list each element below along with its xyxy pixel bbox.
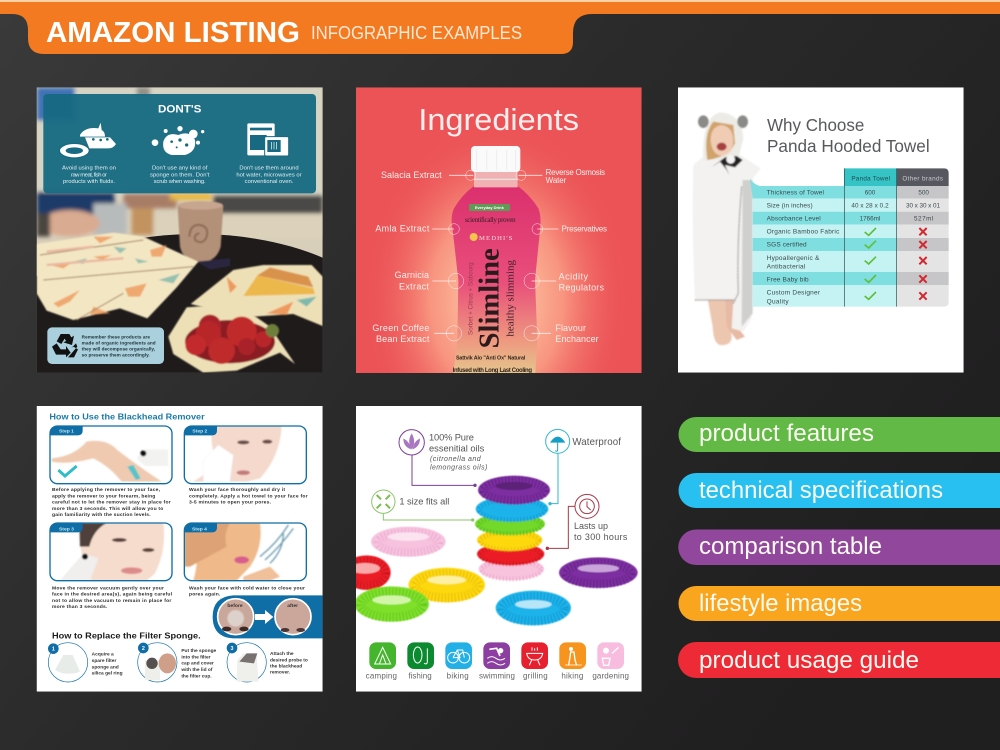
icon: swimming: swimming — [479, 672, 515, 681]
ingredient callouts: Regulators — [559, 282, 604, 292]
filter step 3 — [227, 643, 308, 682]
filter step 2: with the lid of — [180, 667, 213, 673]
bottle: Infused with Long Last Cooling — [453, 368, 532, 374]
callout: one size fits all — [372, 490, 474, 522]
panel: product features, mosquito bands — [343, 406, 642, 692]
filter step 2: into the filter — [181, 654, 211, 660]
comparison table: Other brands — [902, 175, 943, 182]
cup — [178, 201, 230, 269]
note text: Remember these products are — [82, 334, 150, 339]
step 1 text: apply the remover to your forearm, being — [52, 493, 155, 499]
step 1: Step 1 — [59, 429, 74, 435]
note text: so preserve them accordingly. — [82, 352, 150, 357]
panel: product usage guide — [37, 406, 323, 692]
panel: ingredients, product features — [356, 87, 642, 373]
note text: they will decompose organically, — [82, 346, 155, 351]
icon: hiking — [559, 642, 586, 681]
table — [36, 234, 323, 373]
row labels — [767, 189, 840, 306]
bottle — [452, 146, 541, 374]
pill: product features — [678, 417, 1000, 452]
photo background — [37, 87, 323, 238]
guide heading: How to Use the Blackhead Remover — [49, 411, 205, 421]
overlay captions: Don't use them around — [239, 165, 299, 171]
table heading: Why Choose — [767, 115, 864, 135]
filter step 1: sponge and — [92, 664, 119, 670]
stacked bands — [475, 476, 550, 580]
ingredient callouts: Acidity — [559, 271, 588, 281]
pill: product usage guide — [678, 642, 1000, 678]
icon: biking: biking — [447, 672, 469, 681]
step 1 — [50, 426, 172, 484]
comparison table — [750, 168, 949, 307]
row labels: Antibacterial — [767, 264, 805, 271]
activity icons — [366, 642, 629, 681]
step 2 text: Wash your face thoroughly and dry it — [189, 487, 285, 493]
filter step 2 — [138, 643, 217, 682]
overlay captions: scrub when washing. — [154, 179, 206, 185]
filter step 3: the blackhead — [270, 664, 302, 670]
filter step 2: 2 — [142, 646, 145, 652]
callout: essential oils: essenitial oils — [429, 444, 485, 454]
step 2 text — [189, 487, 308, 506]
step 2 — [184, 426, 306, 484]
overlay captions: sponge on them. Don't — [150, 172, 210, 178]
values: 30 x 30 x 01 — [906, 203, 940, 210]
filter step 1: spare filter — [92, 658, 116, 664]
filter step 3: 3 — [231, 646, 234, 652]
values: 527ml — [914, 216, 933, 223]
bottle: Everyday Drink — [475, 205, 505, 210]
before and after callout: after — [287, 603, 298, 609]
filter step 3: remover. — [270, 670, 291, 676]
overlay heading: DONT'S — [158, 103, 201, 115]
values: 1766ml — [860, 216, 880, 223]
ingredient callouts: Amla Extract — [375, 223, 430, 233]
step 3: Step 3 — [59, 526, 74, 532]
filter heading: How to Replace the Filter Sponge. — [52, 631, 201, 641]
icons: green checks — [865, 228, 876, 299]
icon: camping — [366, 642, 397, 681]
icon: grilling — [521, 642, 548, 681]
ingredient callouts: Reverse Osmosis — [546, 168, 605, 177]
ingredient callouts: Water — [546, 176, 567, 185]
callout: essential oils — [399, 430, 487, 487]
step 1 text: careful not to let the remover stay in place for — [52, 500, 171, 506]
ingredient callouts: Salacia Extract — [381, 170, 442, 180]
step 2: Step 2 — [192, 429, 208, 435]
step 3 text: Move the remover vacuum gently over your — [52, 585, 164, 591]
row labels: Hypoallergenic & — [767, 255, 820, 262]
overlay captions — [62, 165, 302, 185]
filter step 1: 1 — [52, 647, 55, 653]
filter step 2: Put the sponge — [181, 648, 217, 654]
legend pills — [678, 417, 1000, 678]
callout: lasts up to 300 hours: Lasts up — [574, 521, 608, 531]
icon: camping: camping — [366, 672, 397, 681]
comparison table: Panda Towel — [851, 175, 890, 182]
overlay captions: hot water, microwaves or — [236, 172, 302, 178]
step 3 text: face in the desired area(s), again being careful — [52, 592, 173, 598]
step 3 — [50, 523, 172, 581]
step 1 text: gain familiarity with the suction levels. — [52, 512, 151, 518]
filter step 3: desired probe to — [270, 657, 308, 663]
step 3 text: more than 3 seconds. — [52, 604, 108, 610]
subtitle: INFOGRAPHIC EXAMPLES — [311, 23, 522, 43]
dont's overlay — [43, 94, 316, 193]
overlay captions: raw meat, fish or — [71, 172, 107, 178]
icon: hiking: hiking — [561, 672, 583, 681]
ingredient callouts: Extract — [399, 281, 429, 291]
step 4 text: Wash your face with cold water to close your — [189, 585, 305, 591]
step 4 text: pores again. — [189, 592, 221, 598]
filter step 1: Acquire a — [92, 652, 114, 658]
table heading: Panda Hooded Towel — [767, 136, 930, 156]
filter step 3: Attach the — [270, 651, 294, 657]
row labels: SGS certified — [767, 242, 807, 249]
callout: lasts up to 300 hours: to 300 hours — [574, 532, 628, 542]
arrow — [255, 610, 273, 624]
pill: comparison table — [678, 530, 1000, 565]
title: AMAZON LISTING — [46, 17, 300, 49]
pill: product usage guide: product usage guide — [699, 647, 919, 674]
wrap and strawberries, bowl — [168, 303, 295, 373]
header banner — [0, 0, 1000, 54]
note text — [82, 334, 156, 357]
pill: lifestyle images: lifestyle images — [699, 590, 862, 617]
overlay captions: Don't use any kind of — [152, 165, 208, 171]
callout: waterproof: Waterproof — [572, 437, 621, 448]
icon: meat and chicken — [59, 123, 116, 158]
callout: essential oils: 100% Pure — [429, 433, 474, 443]
step 1 text: more than 3 seconds. This will allow you to — [52, 506, 163, 512]
row labels: Thickness of Towel — [767, 189, 824, 196]
callout connectors — [432, 170, 558, 341]
values: 40 x 28 x 0.2 — [851, 203, 889, 210]
values: 500 — [918, 189, 929, 196]
ingredient callouts: Green Coffee — [372, 323, 429, 333]
step 4 — [184, 523, 306, 581]
icon: swimming — [479, 642, 515, 681]
bottle: Slimline — [473, 248, 505, 348]
bottle: scientifically proven — [465, 216, 516, 224]
icon: gardening — [592, 642, 629, 681]
icon: fishing: fishing — [408, 672, 432, 681]
before and after callout: before — [227, 603, 243, 609]
wrap and cake, right — [191, 265, 323, 326]
icon: biking — [445, 642, 472, 681]
step 4 text — [189, 585, 305, 598]
step 3 text — [52, 585, 173, 610]
panel: comparison table, panda towel — [678, 87, 964, 373]
loose bands — [343, 527, 638, 625]
table heading — [767, 118, 929, 152]
wrap, left — [37, 233, 198, 320]
ingredient callouts: Enchancer — [555, 334, 599, 344]
bottle: healthy slimming — [505, 260, 516, 337]
icon: grilling: grilling — [523, 672, 548, 681]
ingredient callouts: Garnicia — [395, 270, 429, 280]
step 1 text — [52, 487, 171, 518]
bottle: MEDHI'S — [479, 235, 513, 242]
bottle: Sorbet + Citrus + Sabourg — [468, 262, 475, 335]
recycling note — [47, 327, 164, 364]
callout: essential oils: lemongrass oils) — [430, 464, 487, 471]
step 1 text: Before applying the remover to your face, — [52, 487, 161, 493]
pill: technical specifications — [678, 473, 1000, 508]
row labels: Absorbance Level — [767, 216, 821, 223]
bottle label — [469, 204, 510, 211]
step 4: Step 4 — [192, 526, 207, 532]
ingredient callouts — [372, 168, 607, 344]
icon: recycle — [52, 334, 78, 357]
overlay captions: products with fluids. — [63, 179, 115, 185]
pill: product features: product features — [699, 420, 874, 447]
values: 600 — [865, 189, 876, 196]
overlay captions: Avoid using them on — [62, 165, 116, 171]
filter step 1: silica gel ring — [92, 670, 123, 676]
callout: lasts up to 300 hours — [546, 494, 628, 550]
row labels: Quality — [767, 299, 789, 306]
values — [851, 189, 940, 223]
filter step 2: the filter cup. — [181, 673, 212, 679]
icons: red crosses — [919, 228, 927, 300]
row labels: Size (in inches) — [767, 203, 813, 210]
before and after callout — [213, 595, 323, 638]
overlay captions: conventional oven. — [245, 179, 294, 185]
child in hooded towel — [693, 112, 761, 345]
title: Ingredients — [418, 103, 579, 137]
callout: one size fits all: 1 size fits all — [399, 497, 449, 507]
icon: sponge with bubbles — [152, 126, 204, 155]
row labels: Organic Bamboo Fabric — [767, 229, 840, 236]
icon: fishing — [407, 642, 434, 681]
row labels: Custom Designer — [767, 290, 821, 297]
callout: waterproof — [546, 429, 621, 505]
ingredient callouts: Preservatives — [562, 225, 607, 234]
icon: gardening: gardening — [592, 672, 629, 681]
filter step 1 — [48, 643, 123, 682]
table rows — [750, 179, 844, 199]
pill: lifestyle images — [678, 586, 1000, 621]
icon: oven and microwave — [247, 123, 289, 156]
pill: comparison table: comparison table — [699, 533, 882, 560]
filter step 2: cap and cover — [181, 661, 214, 667]
note text: made of organic ingredients and — [82, 340, 156, 345]
bottle: Sattvik Alo "Anti Ox" Natural — [456, 355, 526, 361]
step 3 text: not to allow the vacuum to remain in place for — [52, 598, 171, 604]
step 2 text: completely. Apply a hot towel to your face for — [189, 493, 308, 499]
panel: lifestyle image, beeswax wraps — [36, 87, 323, 373]
column headers — [844, 168, 897, 186]
pill: technical specifications: technical specifications — [699, 477, 943, 504]
row labels: Free Baby bib — [767, 277, 809, 284]
step 2 text: 3-5 minutes to open your pores. — [189, 500, 272, 506]
ingredient callouts: Bean Extract — [376, 334, 430, 344]
ingredient callouts: Flavour — [555, 323, 586, 333]
callout: essential oils: (citronella and — [430, 456, 482, 463]
